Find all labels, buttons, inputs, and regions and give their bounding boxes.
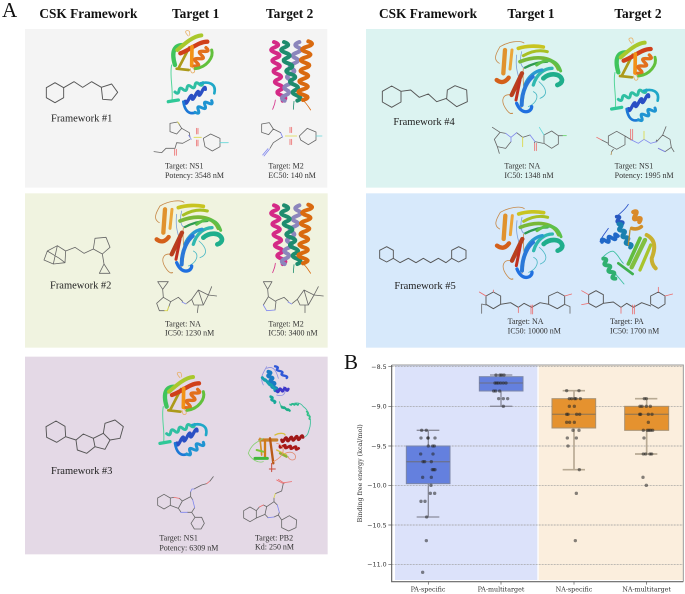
framework 1 structure [46,82,118,103]
panel: framework 2 [25,193,328,348]
box: PA-specific [406,430,450,517]
caption: target 2: Target: NS1 [615,162,653,171]
label: Framework #4: Framework #4 [393,117,456,128]
molecule: target 1 ligand [158,477,213,529]
label: Framework #2: Framework #2 [50,281,111,292]
y axis tick labels: −8.5 [371,364,387,371]
molecule: target 1 ligand [154,122,228,155]
framework 3 structure [46,420,123,453]
heading: Target 1: Target 1 [507,6,555,21]
x axis category labels [411,586,671,594]
panel: framework 3 [25,357,328,554]
caption: target 1: IC50: 1230 nM [165,329,214,338]
protein: NS1 [168,31,215,113]
framework 2 structure [44,237,110,273]
caption: target 1: Target: NA [508,317,544,326]
molecule: target 1 ligand [479,290,572,314]
caption: target 1: Target: NS1 [165,162,204,171]
panel: framework 1 [25,6,327,188]
caption: target 1 [504,162,554,180]
label: Framework #5: Framework #5 [394,281,456,292]
protein: NA [496,207,562,279]
molecule: target 2 ligand [263,282,323,313]
box: PA-multitarget [479,375,523,406]
caption: target 2: Target: M2 [268,320,304,329]
caption: target 2: Kd: 250 nM [255,543,294,552]
caption: target 1: Potency: 3548 nM [165,171,224,180]
protein: PB2 [248,366,310,472]
caption: target 2: Potency: 1995 nM [615,171,674,180]
shaded region: PA [395,365,537,580]
y axis tick labels: −10.5 [367,522,387,529]
panel: framework 4 [366,6,685,188]
caption: target 2 [615,162,674,180]
caption: target 1: Target: NA [165,320,201,329]
y axis tick labels: −11.0 [367,562,387,569]
molecule: target 2 ligand [582,287,673,314]
framework 4 structure [382,86,467,107]
data points [419,373,654,574]
box: NA-specific [552,391,596,470]
caption: target 2: EC50: 140 nM [268,171,316,180]
caption: target 2 [268,320,318,338]
heading: Target 1: Target 1 [172,6,219,21]
caption: target 2 [255,533,294,552]
molecule: target 2 ligand [244,479,297,531]
panel label B: B [344,350,358,374]
caption: target 1: Potency: 6309 nM [159,543,218,552]
x axis category labels: PA-specific [411,586,446,594]
label: Framework #1: Framework #1 [51,113,112,124]
box: NA-multitarget [625,399,669,454]
protein: M2 [271,205,312,273]
shaded region: NA [539,365,683,580]
protein: NS1 [160,372,206,455]
protein: NA [155,201,222,273]
heading: Target 2: Target 2 [614,6,662,21]
panel: box plot of binding free energy [356,364,683,594]
caption: target 2: Target: PB2 [255,533,293,542]
panel: framework 5 [366,193,685,348]
heading: CSK Framework: CSK Framework [379,6,478,21]
heading: Target 2: Target 2 [266,6,314,21]
caption: target 2: IC50: 3400 nM [268,329,318,338]
framework 5 structure [380,247,466,263]
protein: M2 [271,41,312,110]
caption: target 2: Target: PA [610,317,644,326]
y axis title: Binding free energy (kcal/mol) [356,424,364,522]
y axis tick labels: −9.0 [371,404,387,411]
caption: target 2: Target: M2 [268,162,304,171]
caption: target 1 [159,533,218,552]
molecule: target 1 ligand [157,282,217,313]
protein: NA [495,42,562,114]
y axis tick labels: −9.5 [371,443,387,450]
caption: target 1: Target: NS1 [159,533,198,542]
caption: target 2: IC50: 1700 nM [610,326,659,335]
protein: NS1 [612,38,658,121]
caption: target 2 [610,317,659,335]
caption: target 1: IC50: 10000 nM [508,326,561,335]
protein: PA [600,204,656,284]
molecule: target 1 ligand [492,127,567,153]
heading: CSK Framework: CSK Framework [39,6,138,21]
caption: target 2 [268,162,316,180]
x axis category labels: NA-specific [556,586,593,594]
label: Framework #3: Framework #3 [51,466,112,477]
molecule: target 2 ligand [262,123,322,156]
caption: target 1 [508,317,561,335]
caption: target 1 [165,320,214,338]
x axis category labels: PA-multitarget [478,586,525,594]
y axis tick labels: −10.0 [367,483,387,490]
molecule: target 2 ligand [597,127,674,155]
caption: target 1: IC50: 1348 nM [504,171,554,180]
x axis category labels: NA-multitarget [622,586,671,594]
caption: target 1: Target: NA [504,162,540,171]
y axis tick labels [367,364,387,569]
caption: target 1 [165,162,224,180]
